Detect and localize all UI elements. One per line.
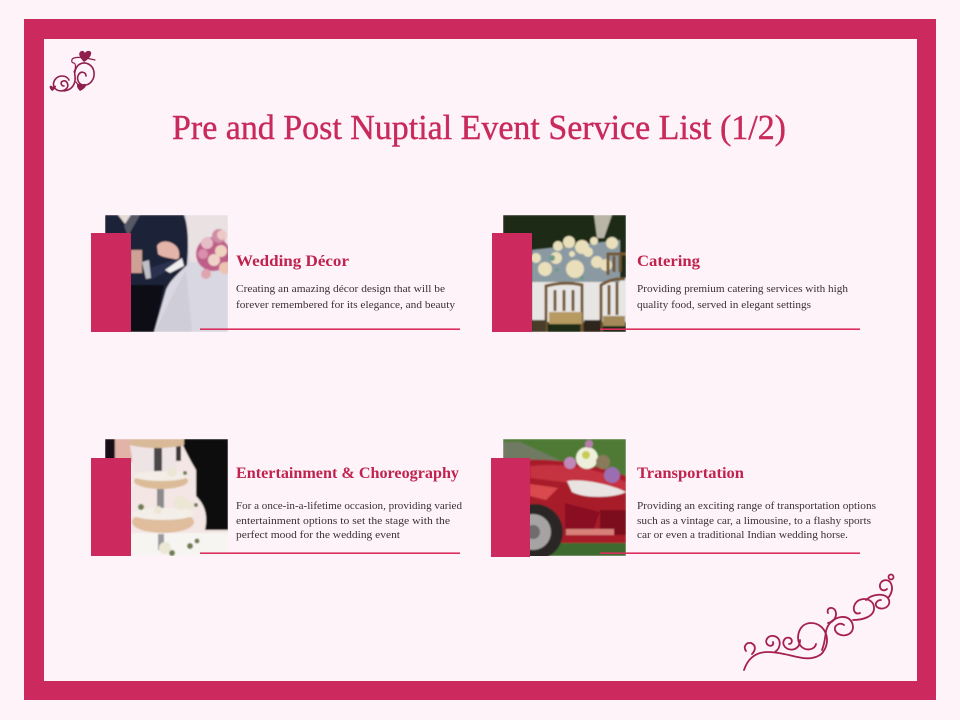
description: entertainment options to set the stage with the — [236, 516, 450, 527]
heading: Entertainment & Choreography — [236, 465, 459, 482]
divider line — [600, 552, 860, 554]
description: perfect mood for the wedding event — [236, 530, 400, 541]
photo: wedding couple — [105, 215, 231, 332]
accent block — [492, 233, 532, 332]
description: quality food, served in elegant settings — [637, 300, 811, 311]
card: Wedding Décor — [91, 215, 460, 332]
description: such as a vintage car, a limousine, to a flashy sports — [637, 516, 871, 527]
description — [637, 284, 849, 311]
description: For a once-in-a-lifetime occasion, providing varied — [236, 501, 463, 512]
description: Providing an exciting range of transportation options — [637, 501, 876, 512]
accent block — [91, 458, 131, 556]
ornament: top-left swirl with hearts — [50, 51, 95, 91]
heading: Catering — [637, 253, 700, 270]
photo: red car with flowers — [503, 439, 626, 560]
card: Catering — [492, 215, 860, 332]
description — [236, 501, 463, 541]
ornament: bottom-right swirl — [744, 574, 894, 670]
divider line — [200, 328, 460, 330]
description: car or even a traditional Indian wedding horse. — [637, 530, 848, 541]
description — [236, 284, 456, 311]
divider line — [200, 552, 460, 554]
heading: Wedding Décor — [236, 253, 349, 270]
accent block — [491, 458, 530, 557]
photo: wedding cake — [105, 439, 228, 556]
heading: Transportation — [637, 465, 744, 482]
accent block — [91, 233, 131, 332]
description: forever remembered for its elegance, and beauty — [236, 300, 456, 311]
divider line — [600, 328, 860, 330]
description: Creating an amazing décor design that will be — [236, 284, 445, 295]
title: Pre and Post Nuptial Event Service List (1/2) — [172, 108, 786, 147]
description — [637, 501, 876, 541]
card: Transportation — [491, 439, 876, 560]
description: Providing premium catering services with high — [637, 284, 849, 295]
card: Entertainment & Choreography — [91, 439, 463, 556]
photo: banquet table — [503, 215, 626, 332]
